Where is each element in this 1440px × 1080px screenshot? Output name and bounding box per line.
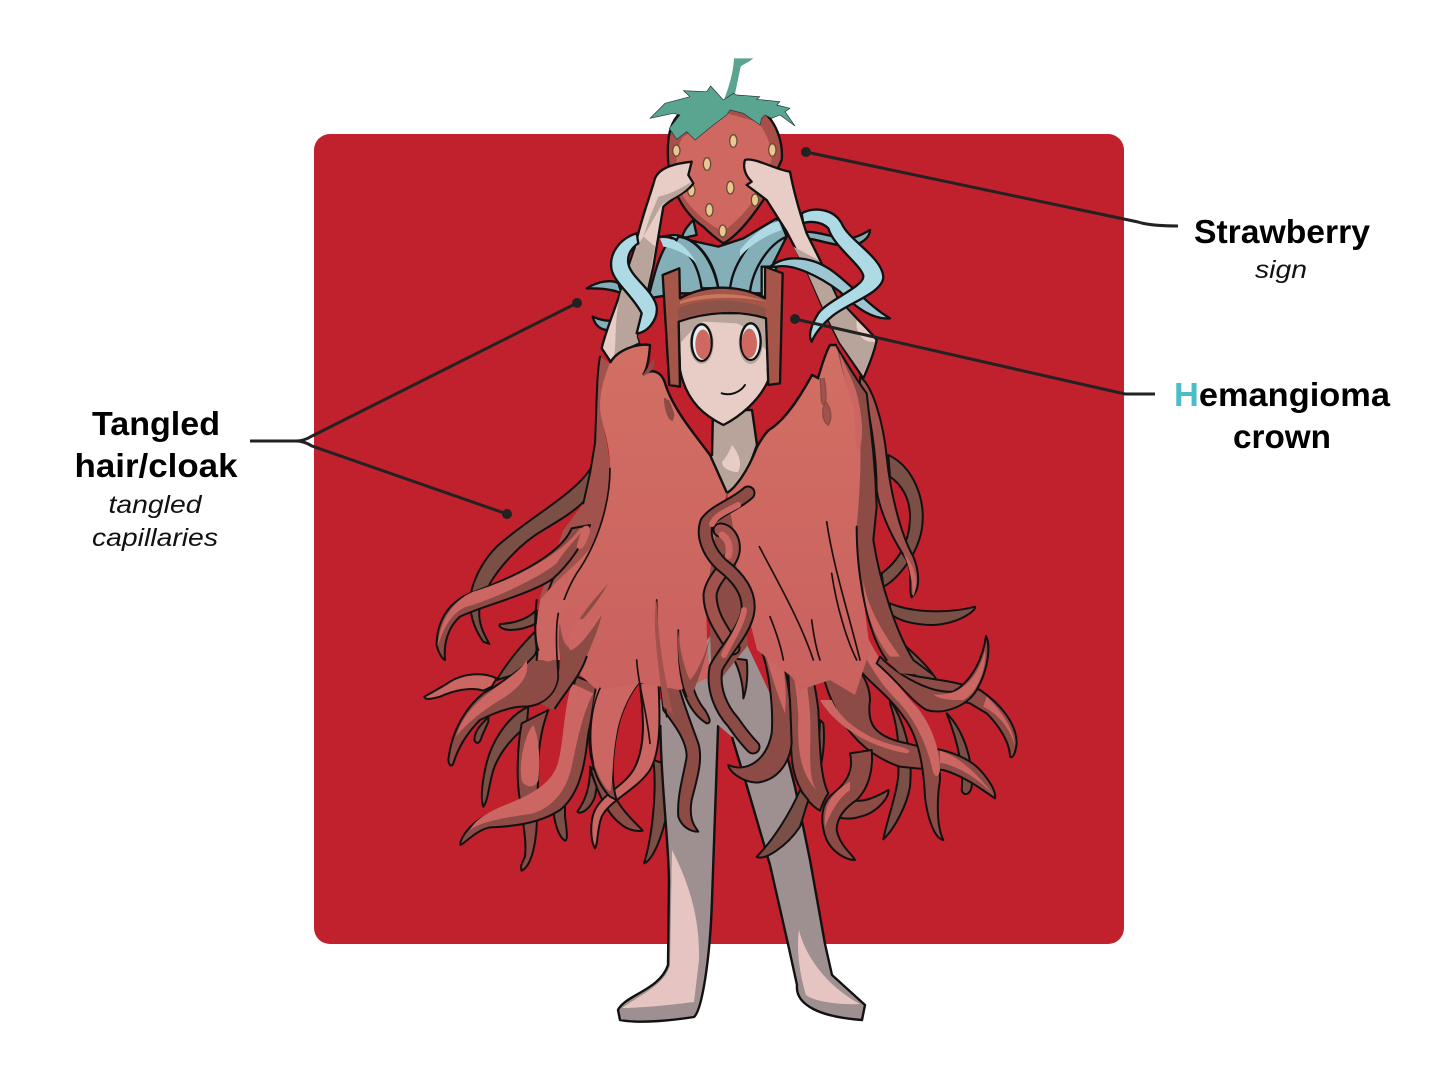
- strand over grey leg: [660, 660, 700, 832]
- leader lines: [250, 152, 1178, 514]
- inner short strand: [678, 677, 710, 723]
- curl strand over the leg: [728, 617, 792, 783]
- finger fused to cloak: [589, 660, 638, 800]
- grey pelvis between cloak halves: [660, 630, 773, 737]
- label: tangled hair/cloak: hair/cloak: [74, 447, 238, 484]
- label: hemangioma crown: crown: [1233, 418, 1331, 455]
- brown tip across the leg: [757, 790, 808, 858]
- right fan strand R: [887, 667, 1017, 757]
- right leg: [732, 700, 865, 1020]
- right cloak outer strands: [837, 347, 933, 675]
- back tentacles, left: [474, 632, 667, 871]
- dark patch behind braid: [706, 500, 748, 690]
- label: tangled hair/cloak: capillaries: [92, 524, 218, 552]
- tentacles under the cloak, left: [424, 640, 710, 848]
- back tentacles, upper right: [882, 455, 975, 625]
- smile: [722, 385, 745, 394]
- centre-left tail to lower left: [460, 677, 603, 845]
- eyes: [690, 323, 763, 364]
- left cloak side highlights: [437, 468, 610, 660]
- strawberry leaves: [650, 86, 795, 140]
- long left tentacle: [448, 640, 558, 766]
- curling tentacle X: [837, 790, 888, 819]
- legs: [618, 700, 865, 1022]
- label: tangled hair/cloak: Tangled: [92, 405, 220, 442]
- S-curl tentacle W: [822, 750, 872, 860]
- left cloak half: [540, 345, 727, 690]
- arms, blue hair and strawberry: [587, 58, 890, 378]
- central braid: [705, 493, 753, 747]
- blue hair tentacles in front of arms: [611, 210, 890, 342]
- small strand below braid: [733, 658, 747, 698]
- leader dots: [502, 147, 811, 519]
- label: hemangioma crown: Hemangioma: [1174, 376, 1391, 413]
- horizontal tentacle S: [817, 600, 995, 798]
- finger tentacle, lower middle: [591, 680, 660, 848]
- back tentacles, upper left: [470, 467, 592, 644]
- label: strawberry sign: [1194, 213, 1371, 284]
- lower left strand tops: [523, 600, 602, 710]
- cloak creases, right: [759, 522, 860, 660]
- crown and face: [663, 267, 783, 425]
- neck: [705, 410, 757, 505]
- label: tangled hair/cloak: tangled: [108, 491, 203, 519]
- red background panel: [314, 134, 1124, 944]
- label: strawberry sign: sign: [1255, 256, 1307, 284]
- blue hair behind crown: [587, 218, 870, 330]
- long left tentacle: [437, 525, 590, 660]
- long strand U: [837, 600, 943, 840]
- right cloak half: [727, 345, 870, 695]
- character figure: [424, 58, 1017, 1022]
- label: tangled hair/cloak: [74, 405, 238, 552]
- back tentacles, lower right: [807, 633, 972, 839]
- left sleeve fold: [643, 360, 673, 420]
- curl strand Q: [877, 636, 988, 711]
- small left tip: [424, 674, 497, 699]
- left leg: [618, 700, 719, 1022]
- tentacles under the cloak, right: [728, 600, 1017, 860]
- inner tall strand: [772, 600, 828, 811]
- arms: [602, 159, 877, 378]
- strawberry: [650, 58, 795, 243]
- right sleeve fold: [820, 378, 831, 425]
- cloak creases, left: [591, 600, 712, 763]
- strawberry stem: [723, 58, 753, 102]
- dark left side band: [537, 357, 610, 660]
- strawberry seeds: [673, 135, 776, 237]
- cloak: [437, 345, 933, 763]
- label: strawberry sign: Strawberry: [1194, 213, 1371, 250]
- label: hemangioma crown: [1174, 376, 1391, 455]
